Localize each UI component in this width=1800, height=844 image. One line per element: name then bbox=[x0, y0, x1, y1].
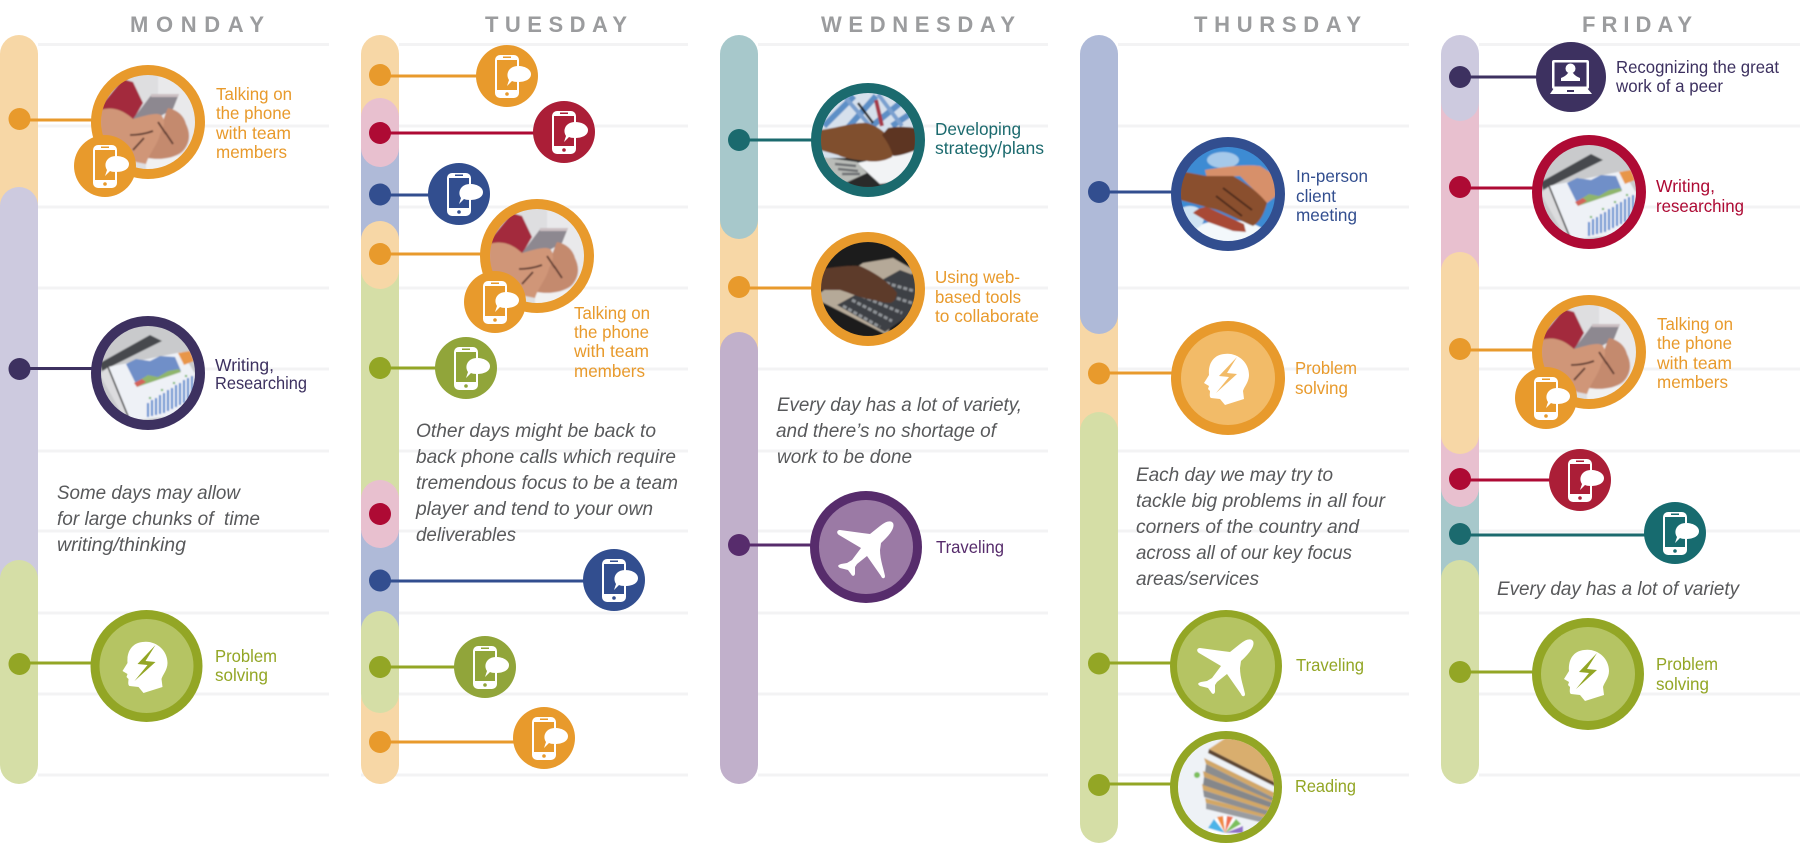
activity: crimson phone call bbox=[1449, 449, 1611, 511]
activity: problem solving: solving bbox=[215, 665, 268, 685]
activity: green phone call bbox=[369, 636, 516, 698]
activity: blue phone call bbox=[369, 549, 645, 611]
activity: developing strategy: Developing bbox=[935, 119, 1021, 139]
activity: traveling bbox=[728, 491, 1004, 603]
timeline bar: tuesday bbox=[361, 35, 399, 784]
commentary: tuesday: back phone calls which require bbox=[416, 446, 676, 468]
commentary: wednesday: and there’s no shortage of bbox=[776, 420, 998, 442]
activity: web-based tools: to collaborate bbox=[935, 306, 1039, 326]
heading: friday: FRIDAY bbox=[1582, 12, 1692, 37]
activity: green phone call bbox=[369, 337, 497, 399]
commentary: tuesday: deliverables bbox=[416, 524, 516, 546]
activity: problem solving bbox=[8, 610, 277, 722]
icon: laptop with person bbox=[1550, 60, 1592, 94]
activity: problem solving bbox=[1088, 321, 1357, 435]
commentary: thursday: areas/services bbox=[1136, 568, 1259, 590]
activity: talking on the phone: Talking on bbox=[216, 84, 292, 104]
activity: recognizing a peer: Recognizing the great bbox=[1616, 57, 1779, 77]
timeline bar: friday bbox=[1441, 35, 1479, 784]
activity: reading: Reading bbox=[1295, 776, 1356, 796]
activity: talking on the phone bbox=[8, 70, 292, 197]
activity: traveling bbox=[1088, 610, 1364, 722]
commentary: monday: Some days may allow bbox=[57, 482, 242, 504]
panel: wednesday bbox=[720, 12, 1048, 784]
commentary: thursday bbox=[1136, 464, 1386, 590]
commentary: tuesday: Other days might be back to bbox=[416, 420, 656, 442]
panel: tuesday bbox=[361, 12, 688, 784]
commentary: wednesday: work to be done bbox=[777, 446, 912, 468]
activity: talking on the phone: with team bbox=[1656, 353, 1732, 373]
activity: talking on the phone: with team bbox=[215, 123, 291, 143]
activity: writing, researching: Researching bbox=[215, 373, 307, 393]
activity: talking on the phone: the phone bbox=[1657, 333, 1732, 353]
commentary: monday: writing/thinking bbox=[57, 534, 186, 556]
commentary: thursday: tackle big problems in all four bbox=[1136, 490, 1386, 512]
activity: web-based tools bbox=[728, 237, 1039, 341]
panel: friday bbox=[1441, 12, 1800, 784]
activity: talking on the phone bbox=[369, 204, 650, 381]
commentary: tuesday bbox=[415, 420, 678, 546]
commentary: thursday: across all of our key focus bbox=[1136, 542, 1352, 564]
commentary: wednesday bbox=[776, 394, 1022, 468]
panel: thursday bbox=[1080, 12, 1409, 844]
activity: problem solving: Problem bbox=[1295, 358, 1357, 378]
activity: blue phone call bbox=[369, 163, 490, 225]
activity: crimson phone call bbox=[369, 101, 595, 163]
commentary: thursday: corners of the country and bbox=[1136, 516, 1360, 538]
timeline bar: wednesday bbox=[720, 35, 758, 784]
activity: problem solving: solving bbox=[1295, 378, 1348, 398]
activity: reading bbox=[1088, 735, 1356, 844]
activity: in-person client meeting: In-person bbox=[1296, 166, 1368, 186]
heading: monday: MONDAY bbox=[130, 12, 264, 37]
activity: problem solving: solving bbox=[1656, 674, 1709, 694]
activity: talking on the phone: Talking on bbox=[1657, 314, 1733, 334]
activity: orange phone call bbox=[369, 707, 575, 769]
activity: teal phone call bbox=[1449, 502, 1706, 564]
activity: writing, researching bbox=[8, 321, 307, 425]
activity: talking on the phone: members bbox=[574, 361, 645, 381]
activity: recognizing a peer: work of a peer bbox=[1615, 76, 1723, 96]
activity: recognizing a peer bbox=[1449, 42, 1779, 112]
activity: problem solving: Problem bbox=[1656, 654, 1718, 674]
activity: problem solving bbox=[1449, 618, 1718, 730]
activity: writing, researching: Writing, bbox=[1656, 176, 1715, 196]
activity: writing, researching: Writing, bbox=[215, 355, 274, 375]
heading: tuesday: TUESDAY bbox=[485, 12, 627, 37]
activity: talking on the phone: members bbox=[1657, 372, 1728, 392]
activity: orange phone call bbox=[369, 45, 538, 107]
timeline bar: monday bbox=[0, 35, 38, 784]
heading: thursday: THURSDAY bbox=[1194, 12, 1361, 37]
activity: in-person client meeting: client bbox=[1296, 186, 1336, 206]
activity: web-based tools: Using web- bbox=[935, 267, 1020, 287]
activity: problem solving: Problem bbox=[215, 646, 277, 666]
panel: monday bbox=[0, 12, 329, 784]
activity: talking on the phone: Talking on bbox=[574, 303, 650, 323]
activity: writing, researching bbox=[1449, 140, 1744, 244]
activity: developing strategy bbox=[728, 88, 1044, 192]
activity: in-person client meeting bbox=[1088, 142, 1368, 260]
activity: in-person client meeting: meeting bbox=[1296, 205, 1357, 225]
activity: traveling: Traveling bbox=[936, 537, 1004, 557]
activity: talking on the phone: members bbox=[216, 142, 287, 162]
commentary: monday bbox=[57, 482, 260, 556]
activity: traveling: Traveling bbox=[1296, 655, 1364, 675]
activity: web-based tools: based tools bbox=[935, 287, 1021, 307]
timeline bar: thursday bbox=[1080, 35, 1118, 843]
activity: writing, researching: researching bbox=[1656, 196, 1744, 216]
activity: talking on the phone bbox=[1449, 300, 1733, 429]
activity: talking on the phone: the phone bbox=[216, 103, 291, 123]
activity: developing strategy: strategy/plans bbox=[935, 138, 1044, 158]
commentary: monday: for large chunks of time bbox=[57, 508, 260, 530]
heading: wednesday: WEDNESDAY bbox=[821, 12, 1015, 37]
commentary: tuesday: player and tend to your own bbox=[415, 498, 653, 520]
activity: talking on the phone: the phone bbox=[574, 322, 649, 342]
commentary: tuesday: tremendous focus to be a team bbox=[416, 472, 678, 494]
commentary: friday: Every day has a lot of variety bbox=[1497, 578, 1740, 600]
commentary: wednesday: Every day has a lot of variety, bbox=[777, 394, 1022, 416]
commentary: thursday: Each day we may try to bbox=[1136, 464, 1333, 486]
activity: talking on the phone: with team bbox=[573, 341, 649, 361]
marker: crimson dot bbox=[369, 503, 391, 525]
